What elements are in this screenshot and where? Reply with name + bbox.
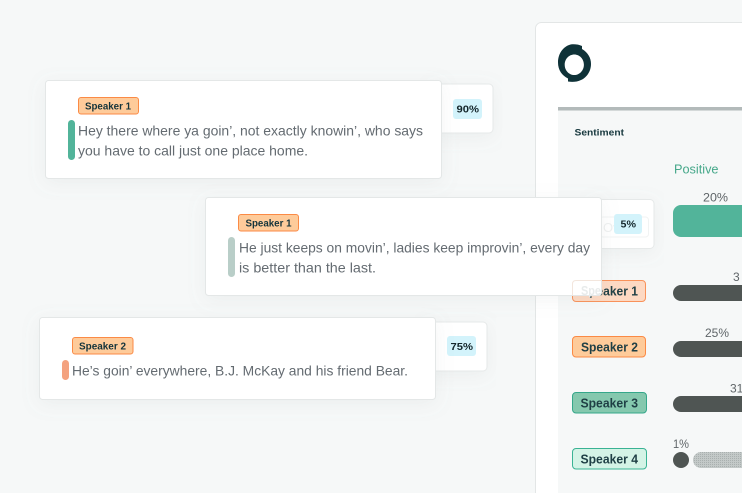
quote text: He’s goin’ everywhere, B.J. McKay and his friend Bear. bbox=[72, 362, 408, 378]
bar: Speaker 1: 3 bbox=[733, 270, 740, 284]
quote text bbox=[78, 122, 423, 158]
heading: Sentiment: Sentiment bbox=[574, 128, 625, 138]
card: score 90%: 90% bbox=[456, 104, 480, 116]
card: quote Speaker 1 second bbox=[206, 198, 602, 298]
bar: Speaker 4 bbox=[673, 437, 742, 468]
bar: Speaker 2 bbox=[673, 326, 742, 357]
sentiment accent bar bbox=[62, 360, 69, 380]
icon: logo ring bbox=[558, 44, 591, 82]
ghost of underlying tag bbox=[572, 280, 601, 298]
tag: Speaker 3: Speaker 3 bbox=[580, 396, 638, 410]
tag: Speaker 2 bbox=[572, 336, 646, 357]
tag: Speaker 2 bbox=[72, 338, 133, 354]
sentiment accent bar bbox=[68, 120, 75, 160]
tag: Speaker 3 bbox=[572, 392, 646, 413]
tag: Speaker 4: Speaker 4 bbox=[580, 452, 639, 466]
quote text: you have to call just one place home. bbox=[78, 142, 308, 158]
tag: Speaker 1 bbox=[78, 98, 138, 114]
tag: Speaker 4 bbox=[572, 448, 646, 469]
card: score 75%: 75% bbox=[450, 341, 474, 353]
bar: overall positive 20% bbox=[673, 190, 742, 237]
bar: Speaker 4: 1% bbox=[673, 437, 689, 451]
tag: Speaker 1 bbox=[238, 214, 298, 231]
sentiment accent bar bbox=[228, 237, 235, 277]
card: quote Speaker 2 bbox=[40, 318, 436, 400]
bar: Speaker 1 bbox=[673, 270, 742, 301]
card: score 5%: Ove bbox=[603, 220, 627, 235]
tag: Speaker 1: Speaker 1 bbox=[246, 218, 292, 230]
card: score 5%: 5% bbox=[620, 218, 637, 230]
bar: Speaker 3 bbox=[673, 382, 742, 412]
panel: sentiment dashboard bbox=[536, 22, 742, 493]
quote text: He just keeps on movin’, ladies keep improvin’, every day bbox=[239, 240, 590, 256]
tag: Speaker 1: Speaker 1 bbox=[85, 102, 131, 112]
quote text: Hey there where ya goin’, not exactly knowin’, who says bbox=[78, 122, 423, 138]
tag: Speaker 1 bbox=[572, 280, 646, 302]
quote text bbox=[239, 240, 590, 276]
card: quote Speaker 1 bbox=[46, 80, 442, 178]
quote text: is better than the last. bbox=[239, 260, 376, 276]
bar: overall positive 20%: 20% bbox=[703, 190, 728, 204]
card: score 5% bbox=[590, 200, 654, 248]
bar: Speaker 2: 25% bbox=[705, 326, 729, 340]
card: score 90% bbox=[430, 84, 493, 133]
card: score 75% bbox=[424, 322, 487, 371]
tag: Speaker 1: Speaker 1 bbox=[581, 284, 638, 298]
tag: Speaker 2: Speaker 2 bbox=[79, 342, 126, 352]
sentiment section background bbox=[558, 107, 742, 493]
ghost of underlying tag: Spe bbox=[581, 283, 601, 298]
column heading: Positive: Positive bbox=[674, 162, 719, 176]
tag: Speaker 2: Speaker 2 bbox=[581, 340, 638, 354]
